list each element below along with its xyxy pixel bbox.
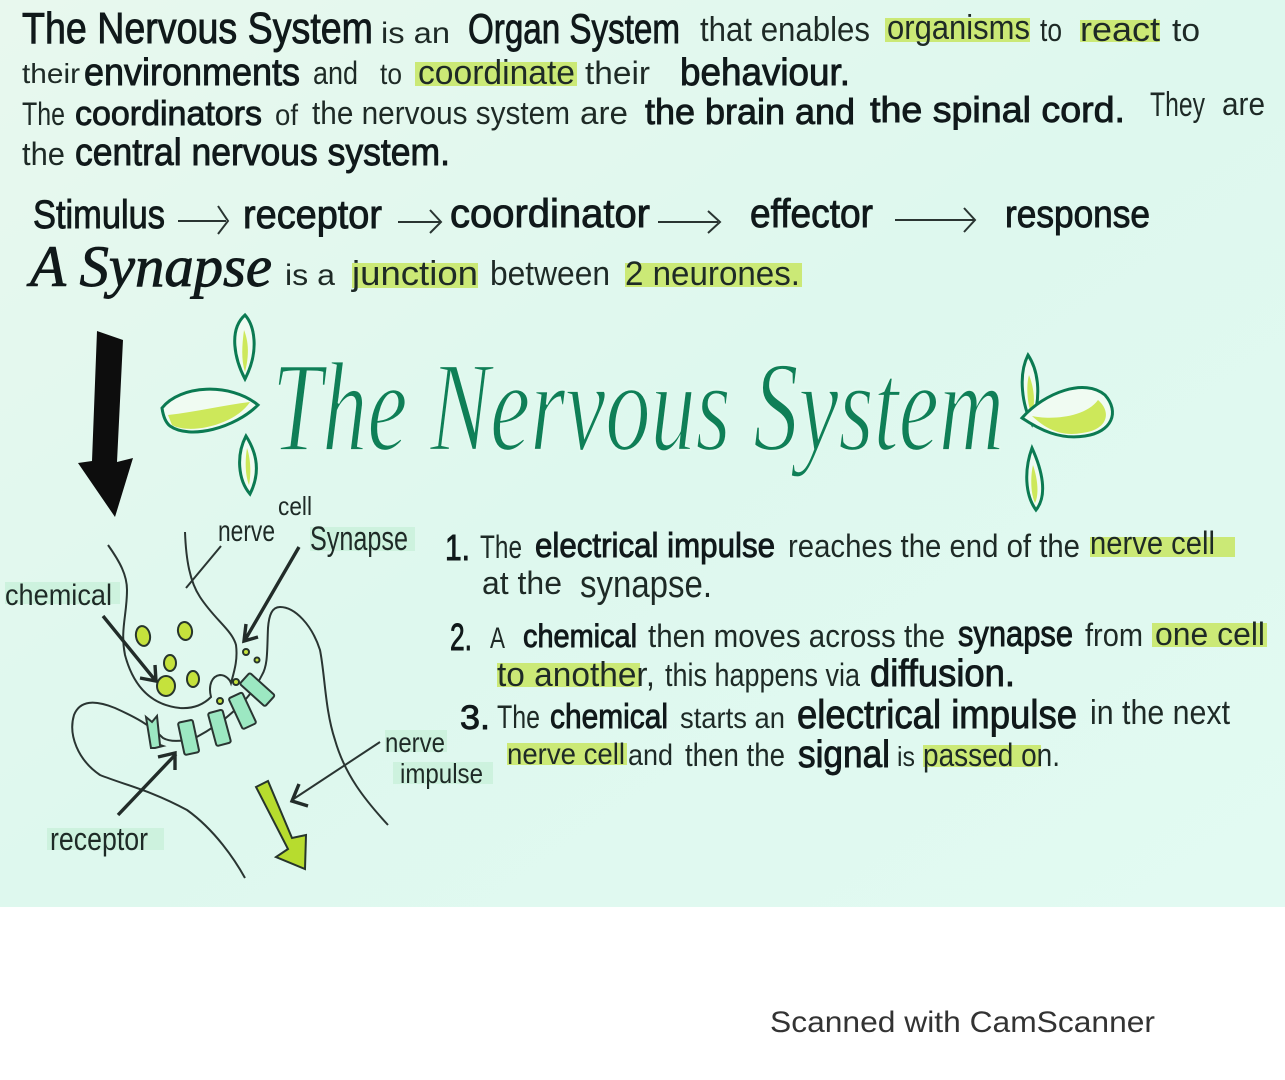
flow: stimulus to response: coordinator — [450, 192, 650, 236]
text block: step 2: synapse — [958, 613, 1073, 654]
watermark: scanner credit: Scanned with CamScanner — [770, 1006, 1155, 1039]
text block: step 1: reaches the end of the — [788, 528, 1080, 564]
text block: definition of the nervous system: of — [275, 99, 299, 132]
text block: step 2: to another, — [497, 656, 655, 694]
text block: definition of the nervous system: The Nervous System — [22, 4, 373, 53]
text block: step 3: The — [497, 699, 540, 735]
text block: step 1: 1. — [445, 527, 470, 568]
text block: step 3: then the — [685, 737, 785, 773]
icon: left leaf cluster — [162, 315, 258, 494]
text block: step 3: and — [628, 739, 673, 772]
text block: step 3 — [460, 693, 1230, 776]
text block: step 2: A — [490, 622, 505, 655]
text block: step 3: chemical — [550, 698, 668, 736]
text block: definition of the nervous system: react — [1080, 11, 1161, 49]
text block: definition of the nervous system: to — [380, 58, 402, 91]
text block: definition of the nervous system: is an — [381, 17, 450, 50]
text block: step 2: this happens via — [665, 657, 860, 693]
labels: chemical — [5, 579, 112, 612]
text block: step 3: passed on. — [923, 737, 1060, 773]
text block: synapse definition: junction — [351, 255, 478, 293]
text block: step 2: one cell — [1155, 616, 1265, 652]
labels: receptor — [50, 821, 148, 857]
text block: definition of the nervous system: They — [1150, 86, 1205, 124]
receptors — [146, 673, 275, 755]
text block: synapse definition: between — [490, 255, 610, 293]
text block: step 2 — [450, 613, 1267, 695]
labels: impulse — [400, 758, 483, 789]
text block: synapse definition — [26, 234, 802, 299]
text block: step 2: chemical — [523, 618, 637, 654]
icon: large black down arrow — [78, 331, 133, 517]
text block: step 3: signal — [798, 734, 890, 776]
text block: step 1: The — [480, 529, 522, 565]
text block: step 3: in the next — [1090, 694, 1230, 732]
labels: nerve — [385, 727, 445, 758]
text block: definition of the nervous system: and — [313, 55, 358, 91]
text block: definition of the nervous system: to — [1040, 12, 1062, 48]
text block: step 2: 2. — [450, 617, 472, 659]
chemical vesicles — [134, 621, 260, 704]
icon: green signal arrow — [256, 781, 306, 869]
text block: step 3: electrical impulse — [797, 693, 1077, 737]
labels: nerve — [218, 515, 275, 548]
text block: synapse definition: A Synapse — [26, 234, 272, 299]
flow: stimulus to response: Stimulus — [33, 193, 165, 237]
text block: definition of the nervous system: organisms — [887, 9, 1030, 47]
text block: definition of the nervous system: that enables — [700, 11, 870, 49]
text block: definition of the nervous system: The — [22, 96, 65, 132]
text block: step 2: from — [1085, 617, 1143, 653]
text block: definition of the nervous system: are — [580, 95, 628, 131]
flow: stimulus to response: receptor — [243, 193, 382, 237]
text block: definition of the nervous system: environments — [84, 52, 300, 94]
text block: definition of the nervous system: their — [22, 58, 80, 89]
flow: stimulus to response: effector — [750, 192, 873, 236]
labels — [5, 491, 493, 857]
flow: stimulus to response: response — [1005, 194, 1150, 236]
text block: step 2: then moves across the — [648, 618, 945, 654]
text block: definition of the nervous system: the — [22, 136, 65, 172]
text block: step 3: is — [897, 741, 915, 772]
lower nerve cell outline — [72, 607, 388, 878]
text block: step 3: starts an — [680, 702, 785, 735]
text block: step 1: electrical impulse — [535, 527, 775, 565]
text block: definition of the nervous system: Organ System — [468, 5, 680, 52]
title: The Nervous System — [272, 336, 1004, 478]
icon: right leaf cluster — [1022, 355, 1112, 510]
text block: definition of the nervous system: to — [1172, 12, 1200, 48]
text block: step 1: at the — [482, 565, 562, 601]
text block: definition of the nervous system: the brain and — [645, 91, 855, 132]
text block: step 2: diffusion. — [870, 653, 1015, 695]
text block: synapse definition: 2 neurones. — [625, 255, 800, 293]
text block: definition of the nervous system: coordinators — [75, 95, 262, 133]
text block: definition of the nervous system: the nervous system — [312, 95, 570, 131]
text block: step 1 — [445, 525, 1235, 606]
text block: definition of the nervous system: their — [585, 55, 650, 91]
text block: step 3: 3. — [460, 699, 490, 737]
text block: definition of the nervous system: coordinate — [418, 54, 575, 92]
label arrows — [103, 546, 380, 815]
text block: definition of the nervous system: are — [1222, 86, 1265, 122]
text block: definition of the nervous system: behaviour. — [680, 52, 850, 94]
text block: definition of the nervous system: central nervous system. — [75, 132, 450, 174]
text block: step 1: synapse. — [580, 564, 712, 606]
text block: step 3: nerve cell — [507, 738, 625, 771]
upper nerve cell outline — [108, 532, 237, 708]
flow: stimulus to response — [33, 192, 1150, 237]
text block: definition of the nervous system: the spinal cord. — [870, 89, 1125, 130]
labels: cell — [278, 491, 312, 521]
labels: Synapse — [310, 520, 408, 558]
text block: definition of the nervous system — [22, 4, 1265, 174]
text block: step 1: nerve cell — [1090, 525, 1215, 561]
text block: synapse definition: is a — [285, 259, 335, 292]
diagram: synapse between two nerve cells — [5, 491, 493, 878]
